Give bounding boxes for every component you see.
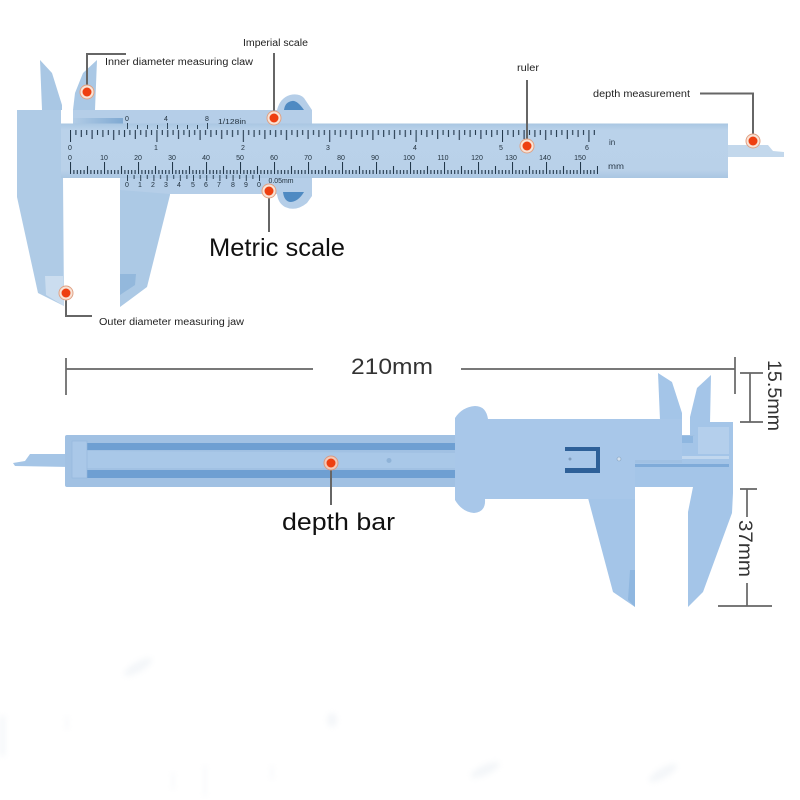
metric vernier numbers: 0 <box>125 182 129 189</box>
lower groove <box>87 470 457 478</box>
callout dot: depth measurement <box>746 134 760 148</box>
back depth rod <box>13 454 70 467</box>
imperial vernier numbers: 0 <box>125 116 129 123</box>
depth bar strip <box>87 451 457 468</box>
frame inner recess <box>698 427 729 454</box>
label: depth bar: depth bar <box>282 509 395 536</box>
metric vernier numbers: 5 <box>191 182 195 189</box>
millimetre numbers <box>68 155 586 162</box>
dimension: 210mm <box>66 354 735 395</box>
unit label millimetres: mm <box>608 162 624 171</box>
frame groove <box>635 464 729 467</box>
millimetre numbers: 50 <box>236 155 244 162</box>
metric vernier numbers: 0 <box>257 182 261 189</box>
slider body <box>455 406 682 513</box>
millimetre numbers: 10 <box>100 155 108 162</box>
metric vernier numbers: 1 <box>138 182 142 189</box>
metric vernier ticks <box>127 175 260 181</box>
sliding outer jaw <box>120 177 170 307</box>
millimetre numbers: 140 <box>539 155 551 162</box>
slider lower band <box>120 178 312 209</box>
metric vernier numbers: 3 <box>164 182 168 189</box>
slider jaw <box>588 497 635 607</box>
slider jaw edge <box>628 570 635 607</box>
imperial vernier numbers: 8 <box>205 116 209 123</box>
callout dot: outer jaw <box>59 286 73 300</box>
jaw tip highlight <box>45 276 64 306</box>
knob hole bottom <box>283 192 304 202</box>
rivet <box>386 458 392 463</box>
imperial vernier numbers <box>125 116 246 126</box>
knob hole top <box>284 101 304 110</box>
inch numbers: 6 <box>585 145 589 152</box>
metric vernier numbers: 4 <box>177 182 181 189</box>
caliper: top view with scales <box>17 60 784 307</box>
dimension: 37mm <box>718 489 772 606</box>
imperial vernier numbers: 1/128in <box>218 119 246 126</box>
imperial vernier ticks <box>127 123 208 129</box>
dimension: 210mm: 210mm <box>351 354 433 379</box>
millimetre numbers: 150 <box>574 155 586 162</box>
inch numbers: 0 <box>68 145 72 152</box>
callout dot: ruler <box>520 139 534 153</box>
claw on slider <box>658 373 682 420</box>
depth rod <box>728 145 784 157</box>
millimetre numbers: 130 <box>505 155 517 162</box>
dimension: 37mm: 37mm <box>734 520 755 577</box>
millimetre numbers: 70 <box>304 155 312 162</box>
callout dot: depth bar <box>324 456 338 470</box>
dimension: 15.5mm <box>740 360 784 431</box>
millimetre numbers: 20 <box>134 155 142 162</box>
dimension: 15.5mm: 15.5mm <box>763 360 784 431</box>
label: depth measurement: depth measurement <box>593 89 690 100</box>
millimetre numbers: 60 <box>270 155 278 162</box>
slider window <box>565 447 621 473</box>
fixed inner claw <box>40 60 62 110</box>
millimetre numbers: 40 <box>202 155 210 162</box>
label: inner diameter measuring claw: Inner diameter measuring claw <box>105 57 254 68</box>
unit label inches: in <box>609 138 615 147</box>
millimetre ticks <box>70 161 598 174</box>
millimetre numbers: 0 <box>68 155 72 162</box>
inch numbers: 1 <box>154 145 158 152</box>
imperial vernier numbers: 4 <box>164 116 168 123</box>
sliding jaw step <box>120 274 136 295</box>
inch numbers: 3 <box>326 145 330 152</box>
fixed jaw frame <box>635 422 733 607</box>
beam scales <box>68 116 624 189</box>
label: ruler: ruler <box>517 63 540 74</box>
leader lines top <box>66 53 753 316</box>
frame recess <box>682 436 693 443</box>
callout dot: metric scale <box>262 184 276 198</box>
upper groove <box>87 443 457 450</box>
millimetre numbers: 120 <box>471 155 483 162</box>
slider upper band <box>73 94 312 124</box>
metric vernier numbers: 0.05mm <box>268 178 294 185</box>
caliper: back view <box>13 373 733 607</box>
slider upper shaded section <box>73 118 123 124</box>
callout dot: imperial scale <box>267 111 281 125</box>
faint background smudges <box>0 655 679 797</box>
back beam body <box>65 435 695 487</box>
leader line: depth bar <box>330 470 332 505</box>
label: metric scale: Metric scale <box>209 234 345 262</box>
metric vernier numbers: 8 <box>231 182 235 189</box>
metric vernier numbers: 2 <box>151 182 155 189</box>
inch numbers: 4 <box>413 145 417 152</box>
callout dot: inner claw <box>80 85 94 99</box>
inch numbers: 2 <box>241 145 245 152</box>
label: outer diameter measuring jaw: Outer diameter measuring jaw <box>99 317 245 328</box>
fixed outer jaw <box>17 110 64 306</box>
label: imperial scale: Imperial scale <box>243 38 308 49</box>
inch numbers: 5 <box>499 145 503 152</box>
main beam <box>61 124 728 178</box>
millimetre numbers: 30 <box>168 155 176 162</box>
inch ticks <box>70 130 598 143</box>
metric vernier numbers: 6 <box>204 182 208 189</box>
millimetre numbers: 80 <box>337 155 345 162</box>
millimetre numbers: 110 <box>437 155 449 162</box>
fixed inner claw back <box>690 375 711 436</box>
inch numbers <box>68 145 589 152</box>
millimetre numbers: 100 <box>403 155 415 162</box>
millimetre numbers: 90 <box>371 155 379 162</box>
metric vernier numbers <box>125 178 294 189</box>
metric vernier numbers: 7 <box>217 182 221 189</box>
metric vernier numbers: 9 <box>244 182 248 189</box>
end slide block <box>72 441 87 478</box>
frame rail <box>682 456 729 459</box>
sliding inner claw <box>73 60 97 110</box>
